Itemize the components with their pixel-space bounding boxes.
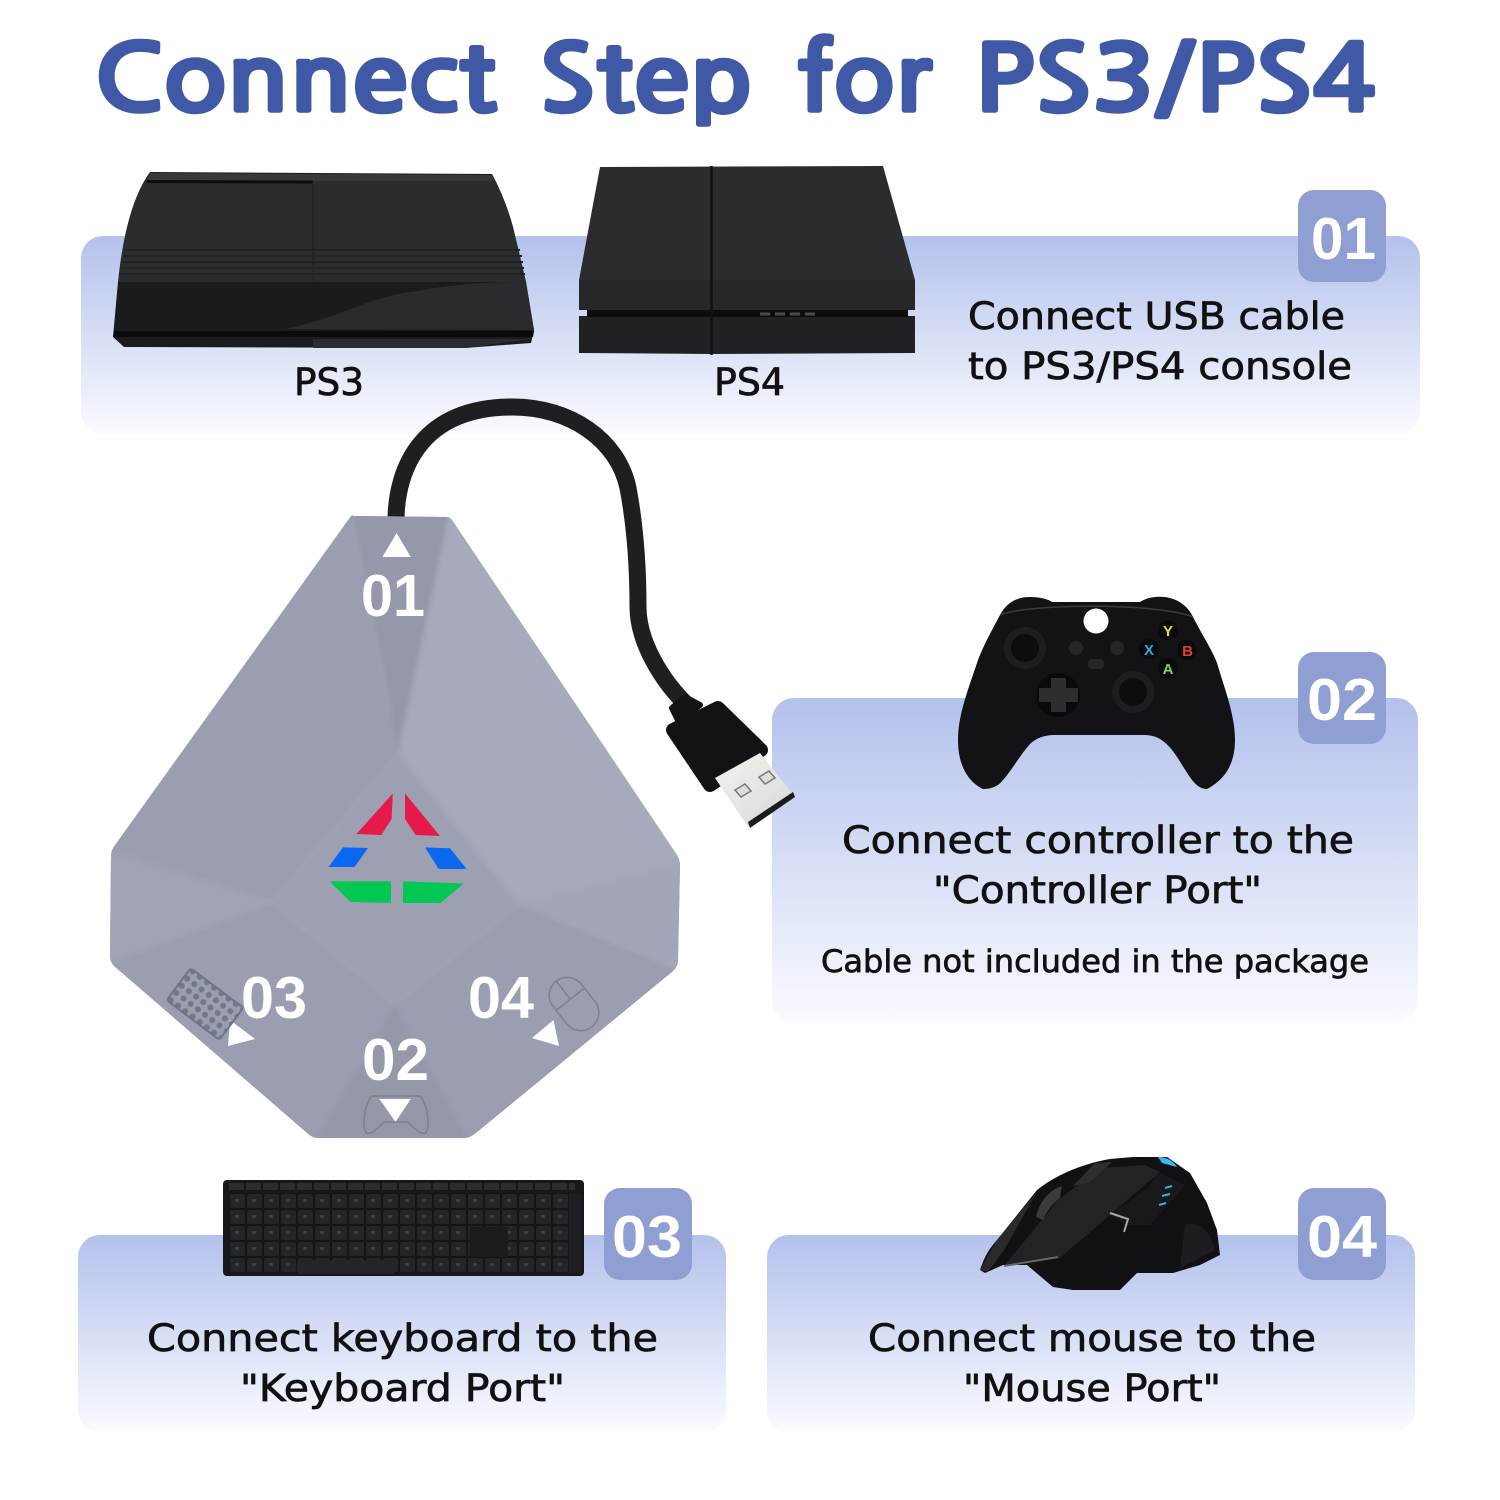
port numbers: 02: [362, 1027, 429, 1093]
title: Step: [539, 34, 753, 125]
step 3 text: "Keyboard Port": [240, 1367, 565, 1410]
badge 01: 01: [1311, 206, 1376, 272]
title: [94, 34, 1376, 125]
icon: mouse: [542, 970, 606, 1038]
step 1 text: [968, 295, 1352, 388]
step 4 text: "Mouse Port": [963, 1367, 1221, 1410]
icon: gamepad: [364, 1096, 428, 1133]
port arrows: [228, 533, 559, 1122]
title: for: [797, 34, 932, 125]
controller: X: [1144, 642, 1154, 659]
step 4 text: [868, 1317, 1316, 1410]
badge 01: [1298, 190, 1386, 282]
step 2 text: Cable not included in the package: [821, 944, 1369, 980]
step 1 text: to PS3/PS4 console: [968, 345, 1352, 388]
badge 04: [1298, 1188, 1386, 1280]
step 2 text: "Controller Port": [933, 869, 1262, 912]
step 4 text: Connect mouse to the: [868, 1317, 1316, 1360]
controller: A: [1163, 661, 1174, 678]
gaming mouse: [980, 1157, 1220, 1290]
port numbers: 04: [468, 965, 534, 1031]
icon: keyboard: [167, 968, 243, 1040]
step 3 text: [147, 1317, 658, 1410]
port numbers: [241, 563, 534, 1093]
USB cable: [396, 407, 795, 828]
panel 01: console connection: [81, 166, 1420, 434]
badge 03: [604, 1188, 692, 1280]
controller: B: [1182, 643, 1193, 660]
panel 03: keyboard connection: [78, 1180, 726, 1432]
badge 02: 02: [1307, 667, 1377, 733]
badge 04: 04: [1307, 1204, 1377, 1270]
LED indicators: [328, 794, 467, 903]
label: PS4: PS4: [714, 361, 785, 404]
PS3 console: [113, 172, 534, 348]
step 1 text: Connect USB cable: [968, 295, 1345, 338]
port numbers: 01: [361, 563, 425, 629]
title: Connect: [94, 34, 496, 125]
step 2 text: Connect controller to the: [842, 819, 1354, 862]
step 3 text: Connect keyboard to the: [147, 1317, 658, 1360]
label: PS3: PS3: [294, 361, 364, 404]
port numbers: 03: [241, 965, 307, 1031]
panel 04: mouse connection: [767, 1157, 1415, 1432]
controller: [958, 597, 1235, 789]
badge 02: [1298, 652, 1386, 744]
hub device: [100, 510, 690, 1145]
badge 03: 03: [612, 1204, 682, 1270]
step 2 text: [821, 819, 1369, 980]
title: PS3/PS4: [974, 34, 1376, 125]
keyboard: [223, 1180, 584, 1276]
panel 02: controller connection: [772, 597, 1418, 1022]
PS4 console: [579, 166, 915, 355]
controller: Y: [1163, 623, 1173, 640]
